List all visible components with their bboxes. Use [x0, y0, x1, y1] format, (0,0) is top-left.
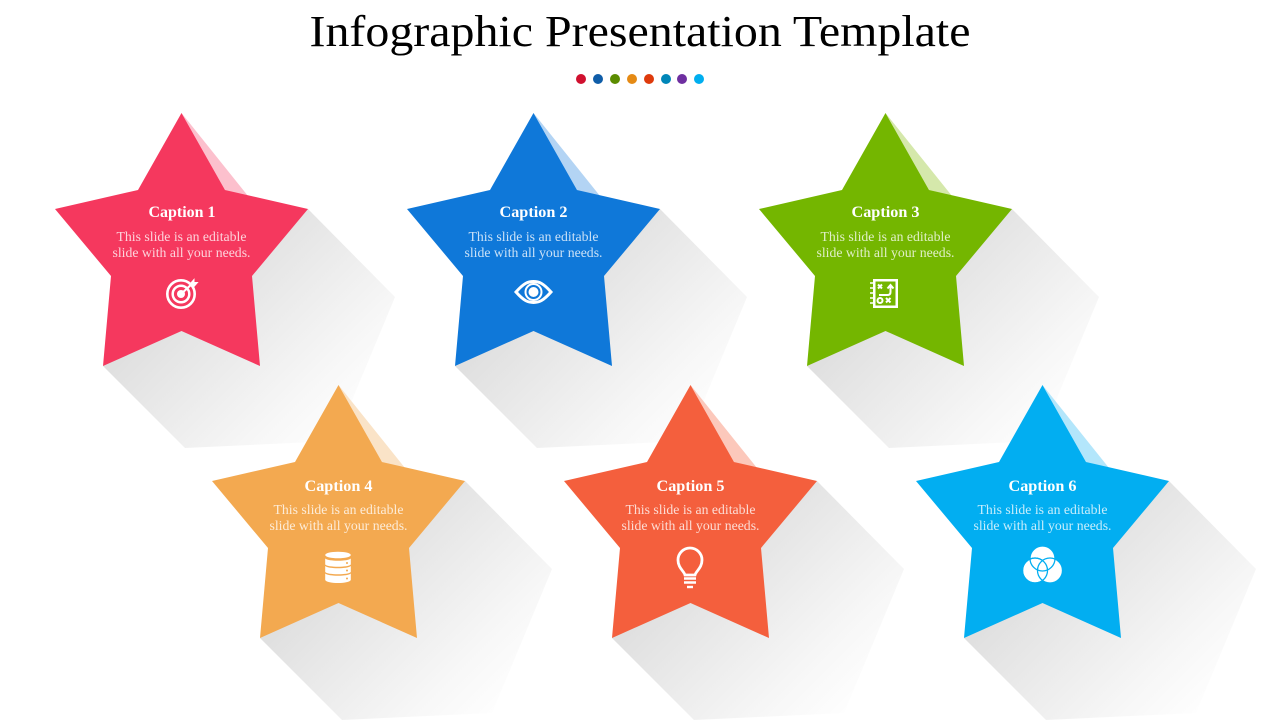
text block 5: This slide is an editable — [626, 503, 756, 518]
text block 6 — [974, 503, 1112, 534]
text block 5: slide with all your needs. — [622, 519, 760, 534]
text block 4: slide with all your needs. — [270, 519, 408, 534]
caption 4: Caption 4 — [304, 478, 372, 495]
panel: star 5 — [564, 385, 904, 720]
text block 1: slide with all your needs. — [112, 246, 250, 261]
text block 6: This slide is an editable — [978, 503, 1108, 518]
icon: strategy notebook — [870, 279, 898, 308]
text block 2: slide with all your needs. — [464, 246, 602, 261]
caption 6: Caption 6 — [1008, 478, 1076, 495]
text block 6: slide with all your needs. — [974, 519, 1112, 534]
text block 4: This slide is an editable — [274, 503, 404, 518]
decorative colored dots row — [576, 74, 704, 84]
icon: database — [325, 552, 351, 583]
caption 2: Caption 2 — [500, 204, 568, 221]
panel: star 2 — [407, 113, 747, 448]
icon: venn diagram — [1022, 546, 1062, 583]
text block 4 — [270, 503, 408, 534]
panel: star 3 — [759, 113, 1099, 448]
panel: star 4 — [212, 385, 552, 720]
text block 5 — [622, 503, 760, 534]
icon: eye — [516, 282, 551, 302]
text block 3 — [816, 230, 954, 261]
caption 3: Caption 3 — [852, 204, 920, 221]
text block 1 — [112, 230, 250, 261]
text block 2: This slide is an editable — [468, 230, 598, 245]
icon: light bulb — [678, 548, 702, 587]
panel: star 6 — [916, 385, 1256, 720]
text block 3: slide with all your needs. — [816, 246, 954, 261]
caption 1: Caption 1 — [148, 204, 216, 221]
text block 2 — [464, 230, 602, 261]
caption 5: Caption 5 — [656, 478, 724, 495]
text block 3: This slide is an editable — [820, 230, 950, 245]
icon: target with arrow — [167, 280, 198, 308]
panel: star 1 — [55, 113, 395, 448]
text block 1: This slide is an editable — [116, 230, 246, 245]
title: Infographic Presentation Template — [310, 7, 970, 56]
